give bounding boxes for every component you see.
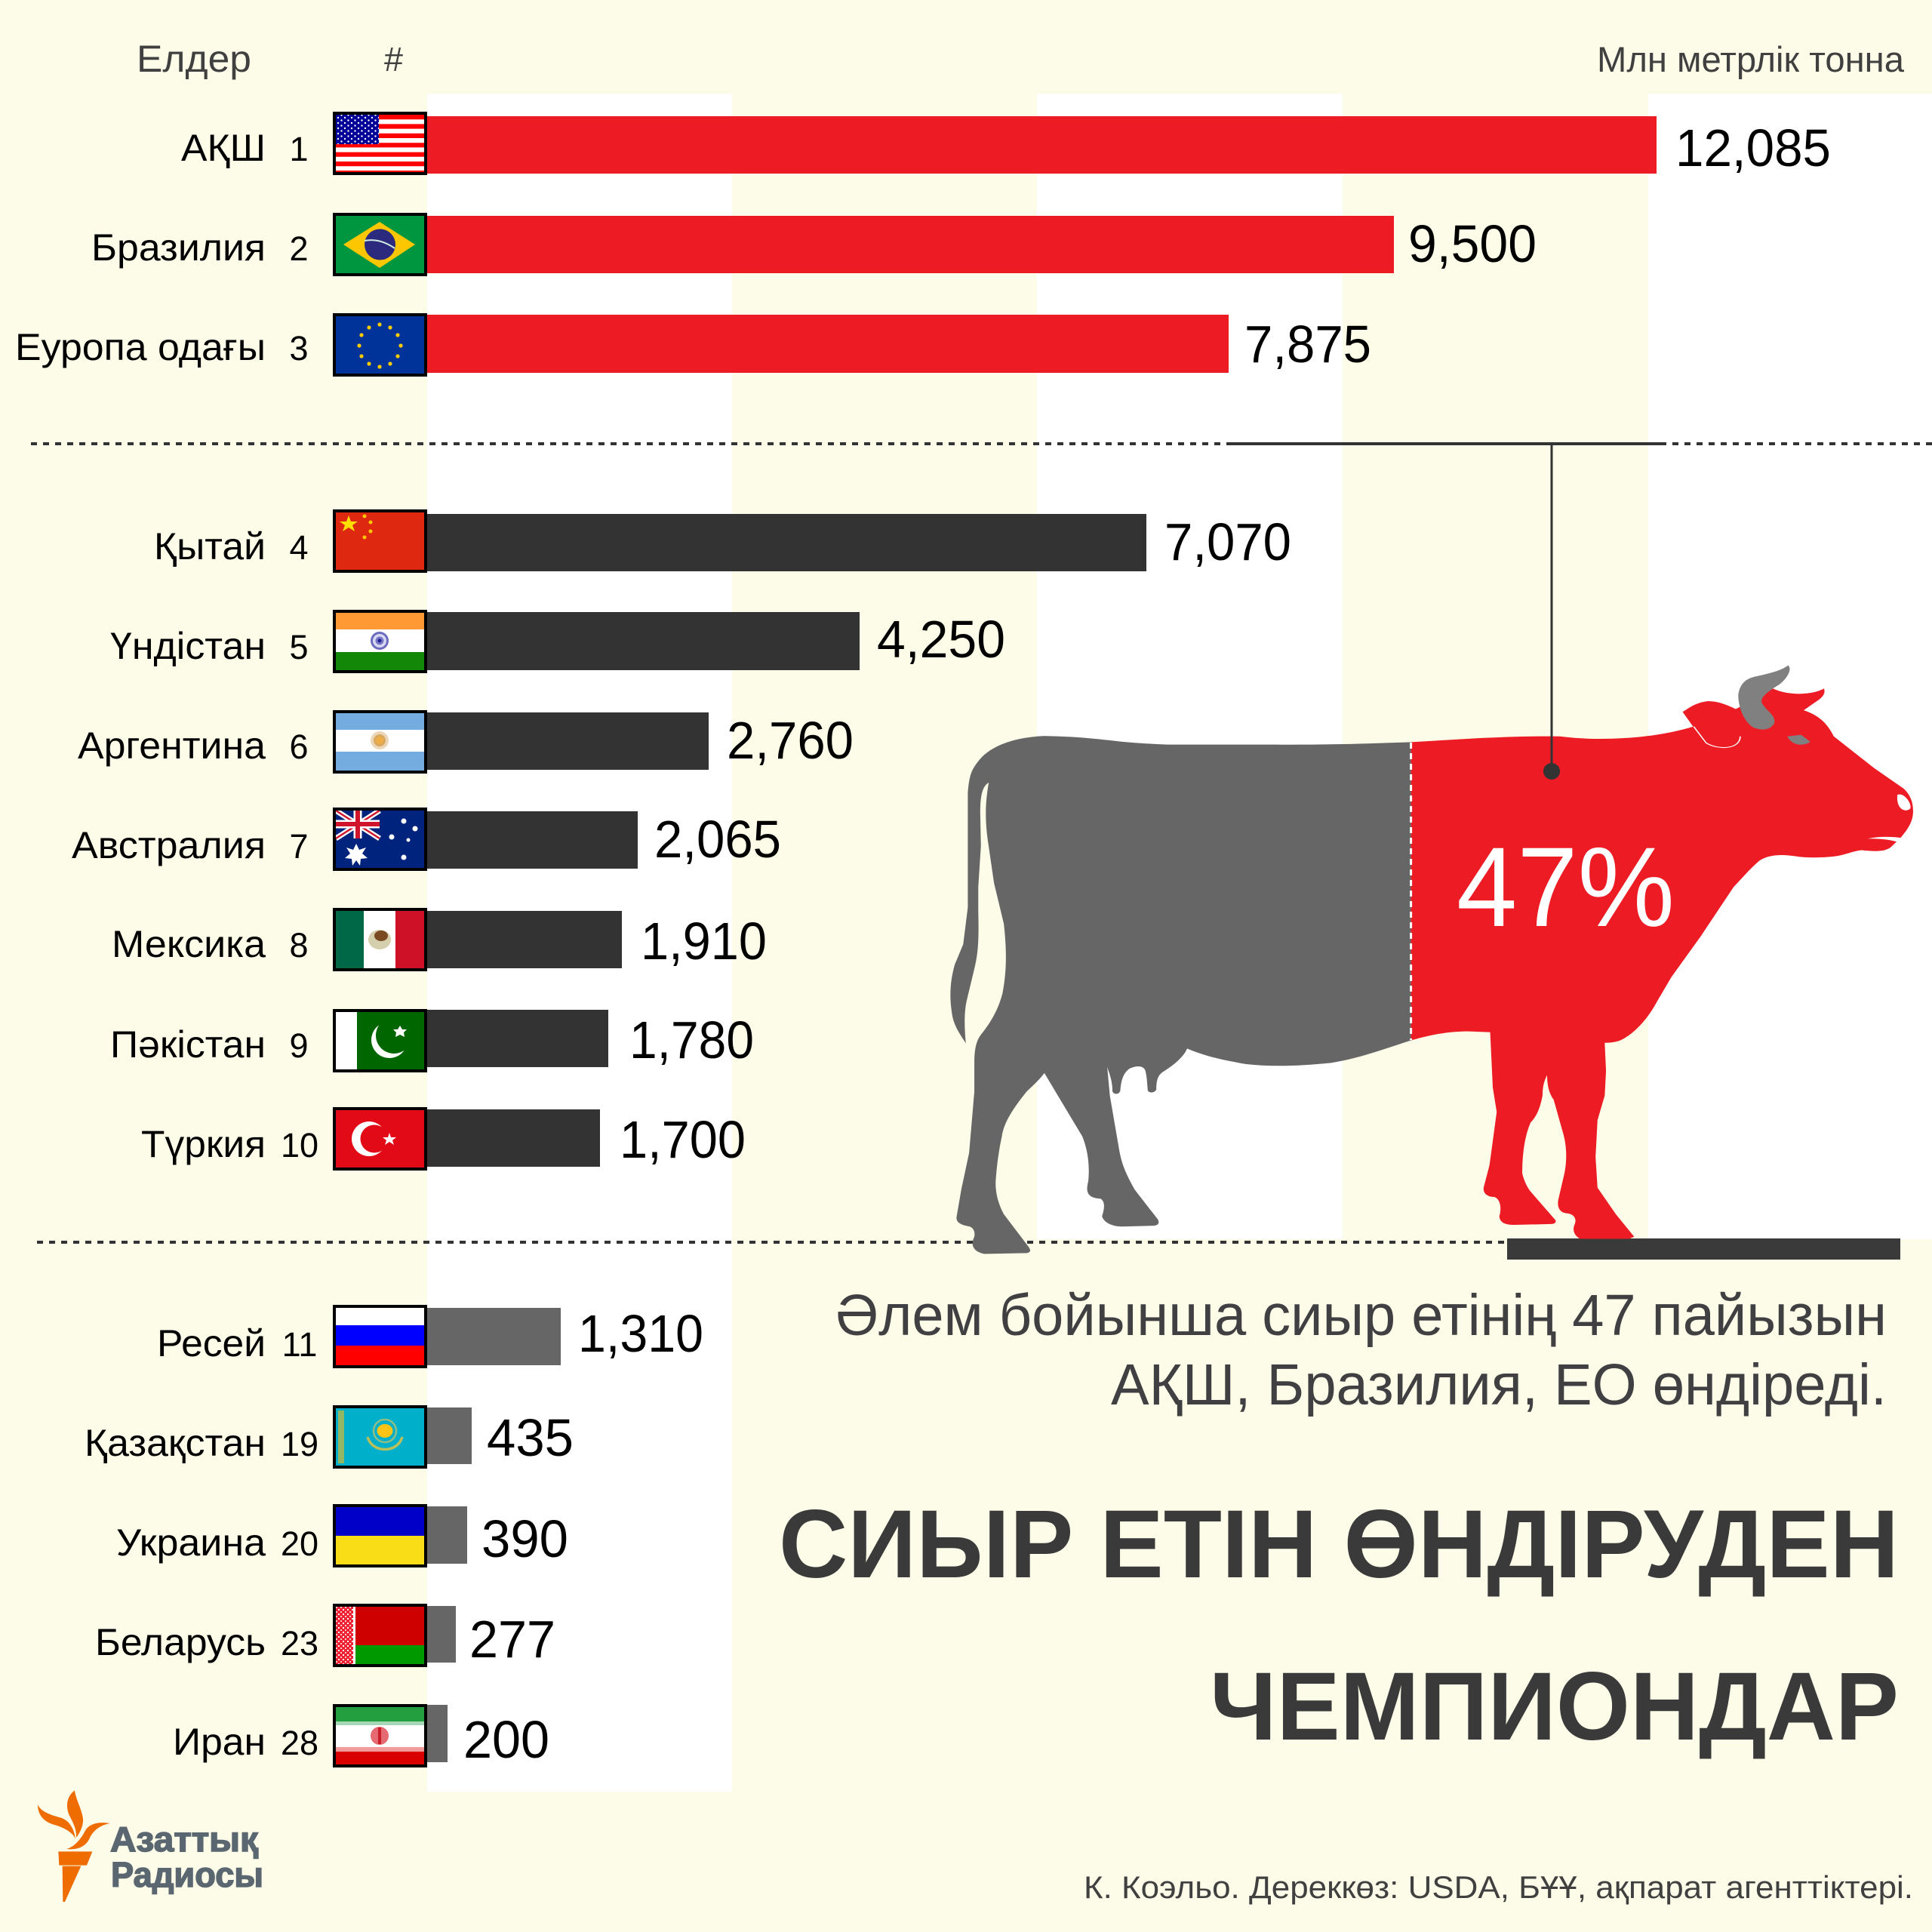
row: Mexico	[112, 908, 767, 971]
value: Mexico: 1,910	[641, 912, 767, 971]
bar: EU	[427, 315, 1229, 373]
row: USA: 1	[289, 130, 309, 168]
value: Iran: 200	[463, 1710, 549, 1769]
main title	[779, 1491, 1899, 1761]
cow: eye	[1787, 735, 1810, 745]
percentage on cow: 47%	[1457, 823, 1675, 950]
row: Brazil	[91, 213, 1537, 276]
value: Brazil: 9,500	[1408, 214, 1537, 273]
flag: Pakistan	[333, 1009, 427, 1072]
flag: China	[333, 509, 427, 573]
main title: СИЫР ЕТІН ӨНДІРУДЕН	[779, 1491, 1899, 1598]
row: Ukraine	[116, 1504, 568, 1568]
header: rank: #	[384, 40, 403, 78]
flag: Russia	[333, 1305, 427, 1368]
value: Russia: 1,310	[578, 1304, 703, 1363]
row: Australia: 7	[289, 827, 309, 866]
row: Iran	[173, 1704, 549, 1769]
row: Belarus: 23	[281, 1624, 318, 1663]
cow: red front 47 percent	[1411, 688, 1913, 1238]
subtitle text: АҚШ, Бразилия, ЕО өндіреді.	[1111, 1352, 1887, 1417]
cow: horn	[1738, 665, 1790, 730]
cow: nostril	[1897, 795, 1911, 811]
row: Australia	[72, 808, 781, 871]
bar: Russia	[427, 1308, 561, 1365]
row: Russia: Ресей	[157, 1322, 266, 1364]
bar: USA	[427, 116, 1657, 174]
logo: wordmark	[110, 1820, 263, 1894]
row: Russia	[157, 1304, 703, 1368]
row: Turkey: 10	[281, 1126, 318, 1164]
cow: ear outline	[1694, 727, 1740, 748]
flag: EU	[333, 313, 427, 377]
flag: Turkey	[333, 1107, 427, 1171]
row: India: 5	[289, 628, 309, 666]
row: Brazil: 2	[289, 229, 309, 268]
row: China: Қытай	[154, 525, 266, 568]
row: Iran: 28	[281, 1724, 318, 1762]
value: Australia: 2,065	[654, 810, 781, 869]
row: European Union	[15, 313, 1371, 377]
flag: USA	[333, 112, 427, 175]
row: Argentina: 6	[289, 728, 309, 766]
row: China	[154, 509, 1291, 573]
value: Argentina: 2,760	[727, 711, 854, 770]
subtitle text: Әлем бойынша сиыр етінің 47 пайызын	[835, 1283, 1887, 1348]
source credit: К. Коэльо. Дереккөз: USDA, БҰҰ, ақпарат агенттіктері.	[1084, 1869, 1913, 1905]
row: USA: АҚШ	[181, 127, 266, 169]
row: Brazil: Бразилия	[91, 226, 266, 269]
row: Turkey	[141, 1107, 746, 1171]
row: Mexico: Мексика	[112, 923, 266, 965]
cow: mouth	[1868, 837, 1902, 842]
row: Mexico: 8	[289, 926, 309, 964]
bar: Ukraine	[427, 1506, 467, 1564]
cow: grey body	[950, 736, 1411, 1254]
value: Pakistan: 1,780	[629, 1011, 754, 1069]
row: Kazakhstan: 19	[281, 1425, 318, 1463]
value: EU: 7,875	[1244, 315, 1371, 374]
flag: Iran	[333, 1704, 427, 1767]
row: Turkey: Түркия	[141, 1123, 266, 1165]
row: USA	[181, 112, 1831, 177]
bar: Australia	[427, 811, 638, 869]
logo: torch icon	[38, 1790, 110, 1902]
flag: Mexico	[333, 908, 427, 971]
leader line from top 3 to cow	[1226, 444, 1660, 780]
flag: Ukraine	[333, 1504, 427, 1567]
bar: Iran	[427, 1705, 448, 1762]
split line on cow	[1410, 743, 1412, 1040]
ground bar under cow	[1507, 1238, 1900, 1260]
row: Ukraine: 20	[281, 1524, 318, 1563]
flag: Argentina	[333, 710, 427, 774]
column headers	[137, 38, 1905, 80]
row: Iran: Иран	[173, 1721, 266, 1763]
row: European Union: Еуропа одағы	[15, 326, 266, 368]
row: Pakistan: Пәкістан	[110, 1023, 266, 1066]
bar: China	[427, 514, 1146, 571]
bar: Argentina	[427, 712, 709, 770]
logo: wordmark: Азаттық	[110, 1820, 259, 1859]
value: China: 7,070	[1164, 512, 1291, 571]
row: Kazakhstan	[85, 1405, 574, 1469]
flag: Australia	[333, 808, 427, 871]
row: Ukraine: Украина	[116, 1521, 266, 1564]
header: unit: Млн метрлік тонна	[1597, 39, 1905, 79]
value: Ukraine: 390	[481, 1509, 568, 1568]
main title: ЧЕМПИОНДАР	[1210, 1653, 1899, 1761]
bar: Pakistan	[427, 1010, 608, 1067]
row: Argentina: Аргентина	[78, 724, 266, 767]
row: China: 4	[289, 528, 309, 567]
flag: Kazakhstan	[333, 1405, 427, 1469]
logo: Azattyq Radio	[38, 1790, 263, 1902]
bar: India	[427, 612, 860, 670]
row: India: Үндістан	[110, 625, 266, 667]
header: countries: Елдер	[137, 38, 251, 80]
row: India	[110, 610, 1005, 673]
row: Pakistan: 9	[289, 1026, 309, 1065]
flag: Belarus	[333, 1604, 427, 1667]
value: Belarus: 277	[469, 1610, 555, 1669]
bar: Turkey	[427, 1109, 600, 1167]
bar: Belarus	[427, 1606, 456, 1663]
bar: Brazil	[427, 216, 1394, 273]
value: Turkey: 1,700	[620, 1110, 746, 1169]
flag: India	[333, 610, 427, 673]
row: Belarus	[95, 1604, 555, 1669]
row: Russia: 11	[282, 1325, 317, 1364]
row: Argentina	[78, 710, 854, 774]
subtitle text	[835, 1283, 1887, 1417]
value: India: 4,250	[877, 610, 1005, 669]
row: Belarus: Беларусь	[95, 1621, 266, 1663]
row: European Union: 3	[289, 329, 309, 368]
logo: wordmark: Радиосы	[111, 1855, 263, 1894]
row: Australia: Австралия	[72, 824, 266, 866]
bar: Kazakhstan	[427, 1407, 472, 1464]
cow illustration	[950, 665, 1913, 1254]
value: USA: 12,085	[1675, 118, 1831, 177]
row: Pakistan	[110, 1009, 754, 1072]
row: Kazakhstan: Қазақстан	[85, 1422, 266, 1464]
flag: Brazil	[333, 213, 427, 276]
value: Kazakhstan: 435	[487, 1408, 574, 1467]
bar: Mexico	[427, 911, 622, 968]
